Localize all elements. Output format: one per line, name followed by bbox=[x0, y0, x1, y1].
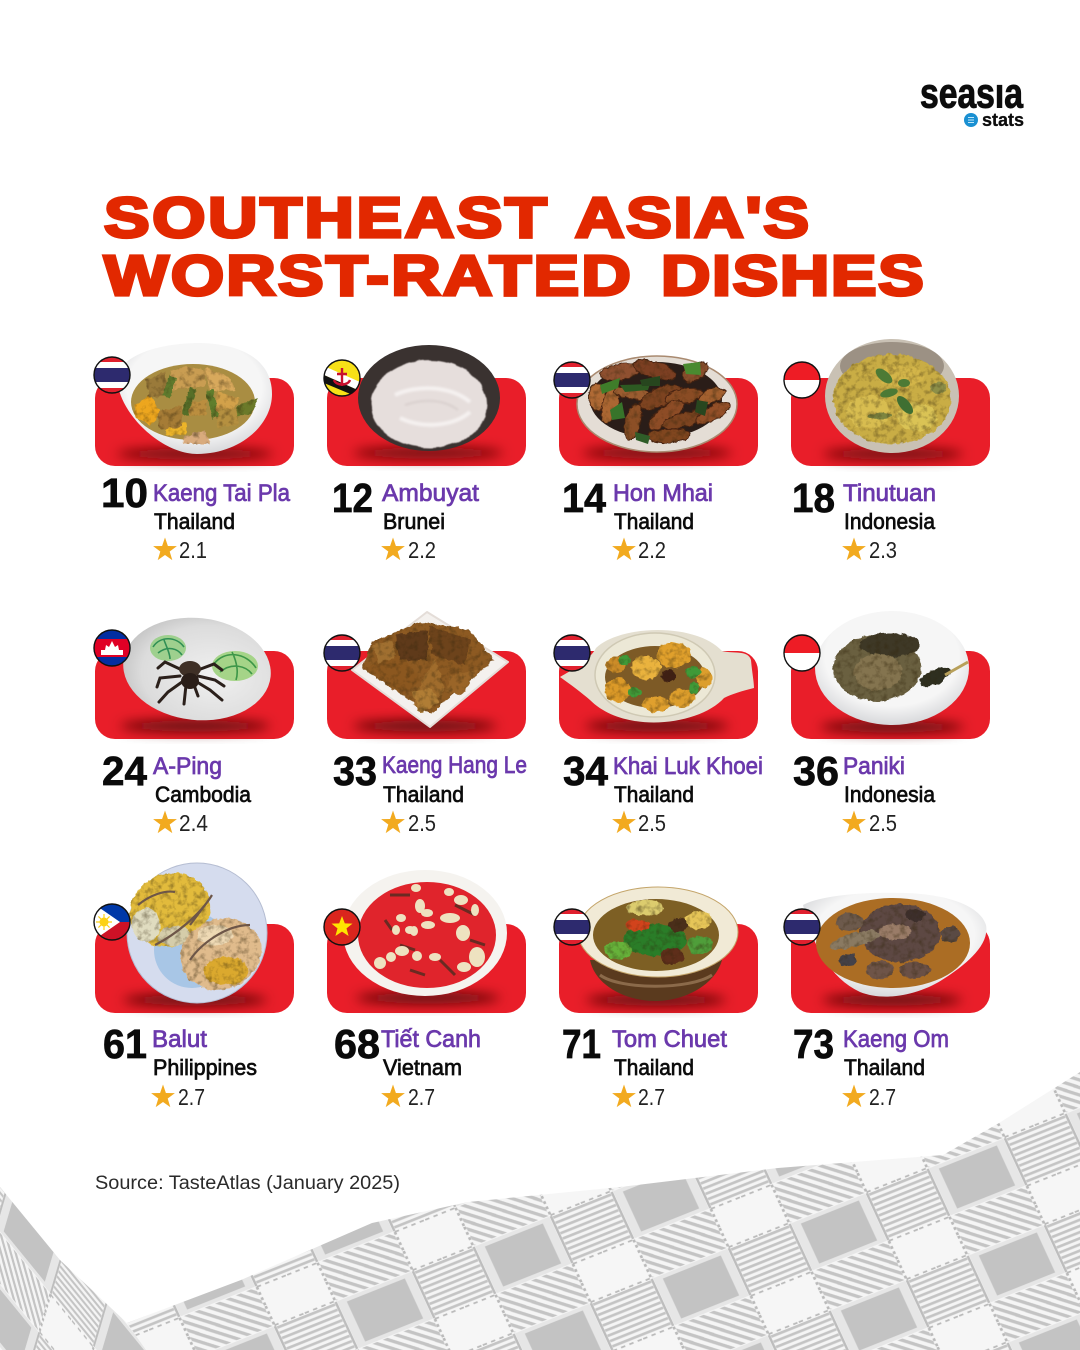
red panel bbox=[327, 651, 526, 739]
rank: 18 bbox=[792, 475, 835, 521]
logo: seasia stats bbox=[915, 70, 1030, 130]
red panel bbox=[791, 651, 990, 739]
dish image: blood soup with peanuts bbox=[343, 870, 507, 996]
flag: Cambodia bbox=[94, 630, 130, 666]
rank: 33 bbox=[333, 748, 377, 794]
logo: seasia stats: seasia bbox=[920, 70, 1024, 116]
rating: 2.2 bbox=[638, 537, 666, 563]
dish name: Paniki bbox=[843, 753, 905, 780]
rank: 73 bbox=[793, 1021, 834, 1067]
rating: 2.7 bbox=[178, 1084, 205, 1110]
rank: 71 bbox=[562, 1021, 601, 1067]
flag: Thailand bbox=[554, 635, 590, 671]
rank: 36 bbox=[793, 748, 839, 794]
rating: 2.2 bbox=[408, 537, 436, 563]
flag: Thailand bbox=[784, 909, 820, 945]
rating bbox=[842, 810, 897, 836]
rating bbox=[381, 537, 436, 563]
rank: 34 bbox=[563, 748, 608, 794]
logo: seasia stats: stats bbox=[982, 110, 1024, 130]
country: Brunei bbox=[383, 509, 445, 534]
dish image: soup in clay pot bbox=[578, 887, 738, 1001]
rating bbox=[842, 537, 897, 563]
dish image: ambuyat in dark bowl bbox=[358, 345, 500, 451]
flag: Brunei bbox=[324, 360, 360, 398]
rank: 10 bbox=[101, 470, 148, 516]
flag: Thailand bbox=[324, 635, 360, 671]
rating bbox=[151, 1084, 205, 1110]
country: Vietnam bbox=[383, 1055, 462, 1080]
dish card: A-Ping bbox=[94, 611, 294, 836]
country: Philippines bbox=[153, 1055, 257, 1080]
background: plaid tablecloth bbox=[0, 1072, 1080, 1350]
rating: 2.7 bbox=[638, 1084, 665, 1110]
flag: Indonesia bbox=[784, 635, 820, 671]
dish name: Kaeng Tai Pla bbox=[153, 480, 291, 507]
dish image: fried silkworms on plate bbox=[577, 356, 737, 452]
rating bbox=[153, 537, 207, 563]
dish name: Kaeng Om bbox=[843, 1026, 949, 1053]
title bbox=[104, 186, 924, 308]
rating: 2.7 bbox=[869, 1084, 896, 1110]
country: Thailand bbox=[383, 782, 464, 807]
dish name: Tiết Canh bbox=[381, 1026, 481, 1053]
red panel bbox=[559, 378, 758, 466]
dish card: Paniki bbox=[784, 611, 990, 836]
rank: 61 bbox=[103, 1021, 147, 1067]
source note: Source: TasteAtlas (January 2025) bbox=[95, 1173, 400, 1194]
red panel bbox=[327, 924, 526, 1013]
dish name: Tinutuan bbox=[843, 480, 936, 507]
title: ASIA'S bbox=[575, 186, 809, 250]
rating bbox=[153, 810, 208, 836]
red panel bbox=[559, 924, 758, 1013]
dish name: Tom Chuet bbox=[612, 1026, 727, 1053]
rating: 2.7 bbox=[408, 1084, 435, 1110]
dish card: Kaeng Tai Pla bbox=[94, 343, 294, 563]
dish image: fried tarantula on plate bbox=[118, 611, 276, 727]
dish image: beef curry in white bowl bbox=[803, 893, 986, 997]
rating bbox=[381, 810, 436, 836]
dish card: Kaeng Om bbox=[784, 893, 990, 1110]
dish name: Kaeng Hang Le bbox=[382, 752, 527, 779]
country: Indonesia bbox=[844, 782, 936, 807]
rating bbox=[612, 1084, 665, 1110]
country: Cambodia bbox=[155, 782, 252, 807]
flag: Philippines bbox=[94, 904, 130, 940]
red panel bbox=[95, 651, 294, 739]
dish name: Balut bbox=[152, 1026, 207, 1053]
dish name: Khai Luk Khoei bbox=[613, 753, 763, 780]
rating: 2.3 bbox=[869, 537, 897, 563]
rank: 14 bbox=[562, 475, 606, 521]
dish name: A-Ping bbox=[153, 753, 222, 780]
flag: Thailand bbox=[554, 909, 590, 945]
dish image: pork curry on square plate bbox=[352, 612, 508, 727]
dish name: Hon Mhai bbox=[613, 480, 713, 507]
country: Thailand bbox=[154, 509, 235, 534]
rating: 2.5 bbox=[408, 810, 436, 836]
red panel bbox=[95, 924, 294, 1013]
rating: 2.5 bbox=[638, 810, 666, 836]
rating: 2.4 bbox=[179, 810, 208, 836]
rating bbox=[381, 1084, 435, 1110]
dish image: curry in white bowl bbox=[117, 343, 272, 454]
dish image: paniki on white plate bbox=[815, 611, 969, 725]
red panel bbox=[791, 924, 990, 1013]
rank: 24 bbox=[102, 748, 147, 794]
rating bbox=[842, 1084, 896, 1110]
title: SOUTHEAST bbox=[104, 186, 547, 250]
dish image: balut eggs on plate bbox=[118, 860, 271, 1003]
rank: 68 bbox=[334, 1021, 380, 1067]
dish card: Tom Chuet bbox=[554, 887, 758, 1110]
rating bbox=[612, 537, 666, 563]
rating: 2.1 bbox=[179, 537, 207, 563]
dish card: Tiet Canh bbox=[324, 870, 526, 1110]
dish image: son-in-law eggs in dish bbox=[560, 630, 754, 722]
red panel bbox=[327, 378, 526, 466]
country: Thailand bbox=[614, 509, 694, 534]
flag: Thailand bbox=[554, 362, 590, 398]
red panel bbox=[791, 378, 990, 466]
rank: 12 bbox=[332, 475, 373, 521]
title: DISHES bbox=[661, 244, 924, 308]
country: Thailand bbox=[844, 1055, 925, 1080]
red panel bbox=[95, 378, 294, 466]
dish card: Ambuyat bbox=[324, 345, 526, 563]
dish card: Khai Luk Khoei bbox=[554, 630, 763, 836]
dish image: tinutuan porridge bowl bbox=[825, 339, 959, 453]
red panel bbox=[559, 651, 758, 739]
rating bbox=[612, 810, 666, 836]
country: Thailand bbox=[614, 782, 694, 807]
dish card: Kaeng Hang Le bbox=[324, 612, 527, 836]
flag: Indonesia bbox=[784, 362, 820, 398]
country: Thailand bbox=[614, 1055, 694, 1080]
dish card: Balut bbox=[94, 860, 294, 1110]
dish card: Hon Mhai bbox=[554, 356, 758, 563]
dish name: Ambuyat bbox=[382, 480, 479, 507]
country: Indonesia bbox=[844, 509, 936, 534]
flag: Vietnam bbox=[324, 909, 360, 945]
title: WORST-RATED bbox=[104, 244, 631, 308]
flag: Thailand bbox=[94, 357, 130, 393]
rating: 2.5 bbox=[869, 810, 897, 836]
dish card: Tinutuan bbox=[784, 339, 990, 563]
